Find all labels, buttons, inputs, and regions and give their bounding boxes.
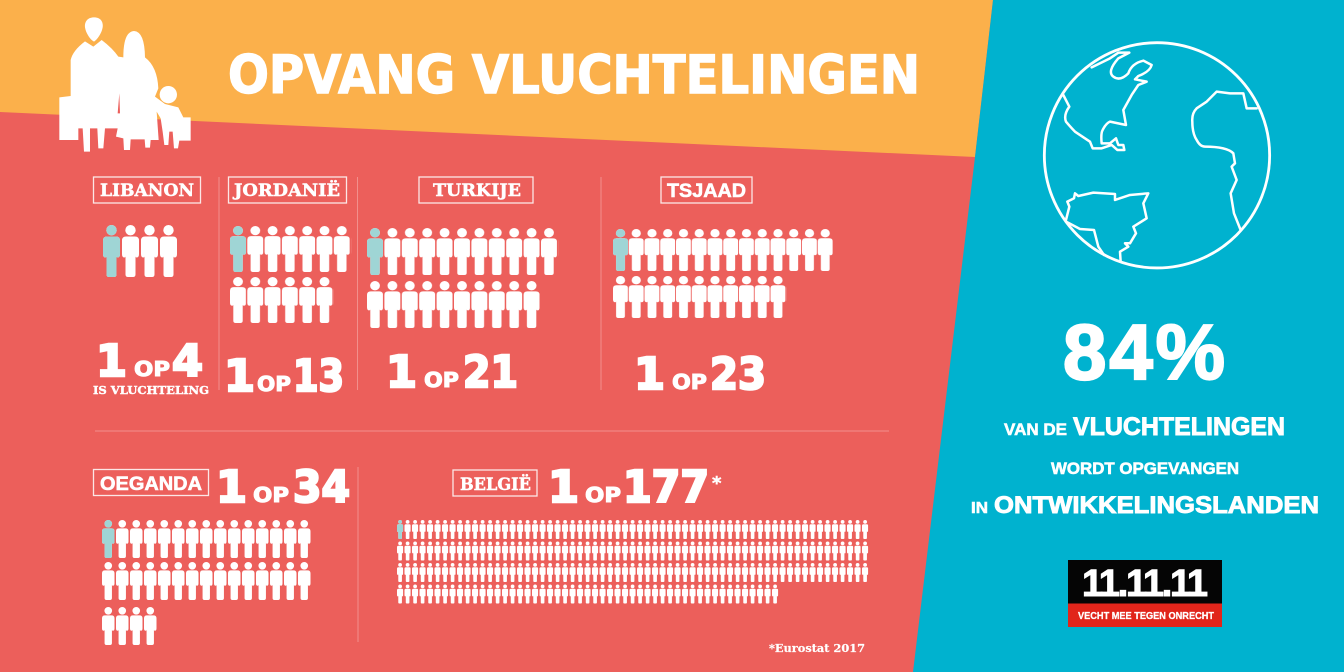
label: Jordanië bbox=[228, 177, 346, 203]
stat: 1 op 4: OP bbox=[134, 357, 170, 381]
panel: Oeganda bbox=[94, 462, 350, 645]
label: Oeganda bbox=[94, 470, 208, 496]
stat: 1 op 13: 1 bbox=[224, 351, 255, 402]
label: Jordanië: JORDANIË bbox=[232, 180, 340, 200]
background: orange header band bbox=[0, 0, 993, 157]
stat: 1 op 4: 1 bbox=[96, 336, 127, 387]
panel: Jordanië bbox=[224, 177, 351, 402]
stat: 1 op 177 bbox=[548, 462, 722, 513]
stat: 1 op 21: OP bbox=[424, 368, 459, 392]
pictogram: 1 of 34 bbox=[102, 520, 312, 645]
label: Oeganda: OEGANDA bbox=[100, 474, 202, 495]
label: Tsjaad: TSJAAD bbox=[667, 181, 746, 202]
stat: 1 op 23: 23 bbox=[710, 349, 766, 400]
text: in ontwikkelingslanden: IN bbox=[971, 500, 988, 517]
stat: 1 op 13: OP bbox=[257, 372, 291, 396]
panel: Tsjaad bbox=[613, 177, 834, 400]
title: OPVANG VLUCHTELINGEN bbox=[228, 45, 920, 106]
stat: 1 op 177: 177 bbox=[623, 462, 709, 513]
stat: 1 op 23: OP bbox=[672, 370, 707, 394]
logo: 11.11.11: VECHT MEE TEGEN ONRECHT bbox=[1078, 610, 1215, 622]
stat: 1 op 177: * bbox=[712, 473, 722, 494]
stat: 1 op 21: 1 bbox=[386, 347, 417, 398]
stat: 1 op 13: 13 bbox=[293, 351, 344, 402]
stat: 1 op 4: 4 bbox=[172, 336, 203, 387]
label: België: BELGIË bbox=[460, 474, 531, 494]
icon: refugee family bbox=[59, 17, 191, 152]
logo: 11.11.11 bbox=[1068, 560, 1222, 627]
label: Tsjaad bbox=[661, 177, 752, 203]
pictogram: 1 of 177 bbox=[397, 520, 870, 604]
text: in ontwikkelingslanden: ONTWIKKELINGSLANDEN bbox=[994, 492, 1319, 519]
text: van de vluchtelingen: VAN DE bbox=[1004, 420, 1067, 439]
logo: 11.11.11: 11.11.11 bbox=[1082, 563, 1208, 605]
stat: 1 op 34: 34 bbox=[293, 462, 350, 513]
pictogram: 1 of 23 bbox=[613, 229, 834, 318]
label: Turkije bbox=[419, 177, 533, 203]
stat: 1 op 4 bbox=[96, 336, 203, 387]
icon: globe bbox=[1044, 43, 1270, 268]
panel: blue sidebar bbox=[913, 0, 1344, 672]
stat: 1 op 21: 21 bbox=[463, 347, 518, 398]
caption: is vluchteling: IS VLUCHTELING bbox=[93, 383, 209, 397]
stat: 1 op 23 bbox=[634, 349, 766, 400]
text: van de vluchtelingen: VLUCHTELINGEN bbox=[1073, 413, 1285, 441]
label: Turkije: TURKIJE bbox=[433, 181, 521, 200]
stat: 1 op 23: 1 bbox=[634, 349, 665, 400]
stat: 1 op 177: 1 bbox=[548, 462, 579, 513]
stat: 1 op 34: OP bbox=[253, 483, 289, 507]
label: Libanon bbox=[94, 177, 200, 203]
panel: Turkije bbox=[367, 177, 558, 398]
panel: Libanon bbox=[93, 177, 209, 397]
panel: België bbox=[397, 462, 870, 655]
text: wordt opgevangen: WORDT OPGEVANGEN bbox=[1051, 460, 1239, 478]
stat: 1 op 34: 1 bbox=[216, 462, 247, 513]
label: België bbox=[453, 470, 537, 496]
stat: 84%: 84% bbox=[1063, 308, 1225, 396]
source note: *Eurostat 2017 bbox=[769, 642, 865, 655]
pictogram: 1 of 4 bbox=[103, 225, 179, 277]
stat: 1 op 177: OP bbox=[585, 483, 621, 507]
pictogram: 1 of 13 bbox=[230, 226, 351, 323]
stat: 1 op 34 bbox=[216, 462, 350, 513]
stat: 1 op 21 bbox=[386, 347, 518, 398]
pictogram: 1 of 21 bbox=[367, 228, 558, 328]
stat: 1 op 13 bbox=[224, 351, 344, 402]
label: Libanon: LIBANON bbox=[100, 181, 194, 200]
